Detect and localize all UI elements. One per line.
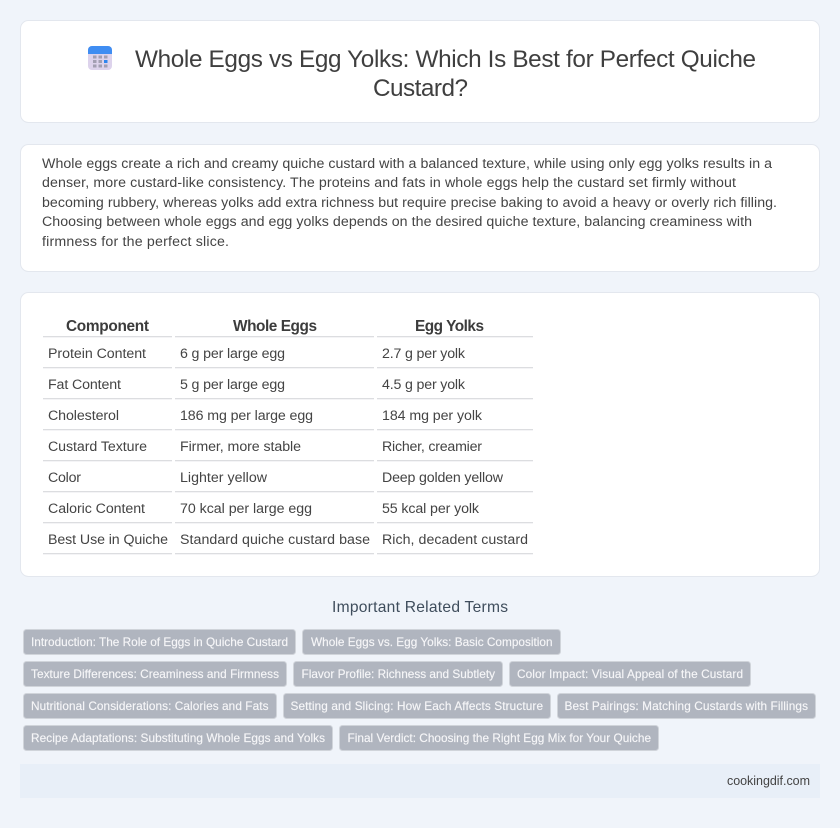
tag: Recipe Adaptations: Substituting Whole Eggs and Yolks (31, 731, 325, 745)
tag (24, 726, 332, 750)
footer source: cookingdif.com (727, 774, 810, 788)
tag: Nutritional Considerations: Calories and Fats (31, 699, 269, 713)
tag (284, 694, 550, 718)
row: protein content (48, 346, 466, 362)
row: cholesterol: 184 mg per yolk (382, 408, 483, 424)
row: cholesterol (48, 408, 483, 424)
row: color (48, 470, 504, 486)
tag: Flavor Profile: Richness and Subtlety (302, 667, 495, 681)
heading: important related terms: Important Related Terms (332, 599, 508, 616)
text block: summary: denser, more custard-like consistency. The proteins and fats in whole eggs help the custard set firmly without (42, 175, 736, 191)
tag: Introduction: The Role of Eggs in Quiche Custard (31, 635, 288, 649)
title: Custard? (373, 75, 468, 102)
row: caloric content: Caloric Content (48, 501, 145, 517)
tag (302, 630, 560, 654)
panel: comparison table (20, 292, 820, 576)
tag: Whole Eggs vs. Egg Yolks: Basic Composition (311, 635, 552, 649)
tag (340, 726, 658, 750)
row: fat content: 5 g per large egg (180, 377, 285, 393)
tag (24, 694, 276, 718)
text block: summary: Choosing between whole eggs and egg yolks depends on the desired quiche texture, balancing creaminess with (42, 214, 752, 230)
tag (294, 662, 502, 686)
tag (558, 694, 816, 718)
tag: Setting and Slicing: How Each Affects Structure (290, 699, 543, 713)
row: fat content: 4.5 g per yolk (382, 377, 466, 393)
row: best use in quiche (48, 532, 528, 548)
tag: Color Impact: Visual Appeal of the Custard (517, 667, 743, 681)
row: cholesterol: Cholesterol (48, 408, 119, 424)
icon: calendar (88, 46, 112, 70)
tag (24, 630, 296, 654)
title: Whole Eggs vs Egg Yolks: Which Is Best for Perfect Quiche (135, 46, 756, 73)
row: custard texture: Custard Texture (48, 439, 147, 455)
table header: Whole Eggs (233, 318, 317, 335)
table header: Egg Yolks (415, 318, 484, 335)
table header: Component (66, 318, 149, 335)
row: cholesterol: 186 mg per large egg (180, 408, 313, 424)
related term tags (24, 630, 816, 750)
row: fat content (48, 377, 466, 393)
row: best use in quiche: Best Use in Quiche (48, 532, 168, 548)
row: caloric content: 70 kcal per large egg (180, 501, 312, 517)
row: fat content: Fat Content (48, 377, 121, 393)
tag (24, 662, 286, 686)
footer bar (20, 764, 820, 798)
row: protein content: 6 g per large egg (180, 346, 285, 362)
tag: Best Pairings: Matching Custards with Fillings (564, 699, 808, 713)
text block: summary: Whole eggs create a rich and creamy quiche custard with a balanced texture, while using only egg yolks results in a (42, 156, 772, 172)
text block: summary: becoming rubbery, whereas yolks add extra richness but require precise baking to avoid a heavy or overly rich filling. (42, 195, 777, 211)
row: protein content: Protein Content (48, 346, 146, 362)
row: custard texture (48, 439, 482, 455)
tag (510, 662, 750, 686)
panel: summary paragraph (20, 144, 820, 272)
panel: header (20, 20, 820, 122)
table header (66, 318, 484, 335)
row: custard texture: Firmer, more stable (180, 439, 301, 455)
text block: summary: firmness for the perfect slice. (42, 234, 229, 250)
row: best use in quiche: Rich, decadent custard (382, 532, 528, 548)
row: best use in quiche: Standard quiche custard base (180, 532, 370, 548)
row: custard texture: Richer, creamier (382, 439, 482, 455)
row: protein content: 2.7 g per yolk (382, 346, 466, 362)
row: color: Lighter yellow (180, 470, 268, 486)
tag: Texture Differences: Creaminess and Firmness (31, 667, 279, 681)
row: caloric content: 55 kcal per yolk (382, 501, 480, 517)
row: color: Deep golden yellow (382, 470, 504, 486)
row: caloric content (48, 501, 480, 517)
row: color: Color (48, 470, 81, 486)
tag: Final Verdict: Choosing the Right Egg Mix for Your Quiche (348, 731, 651, 745)
